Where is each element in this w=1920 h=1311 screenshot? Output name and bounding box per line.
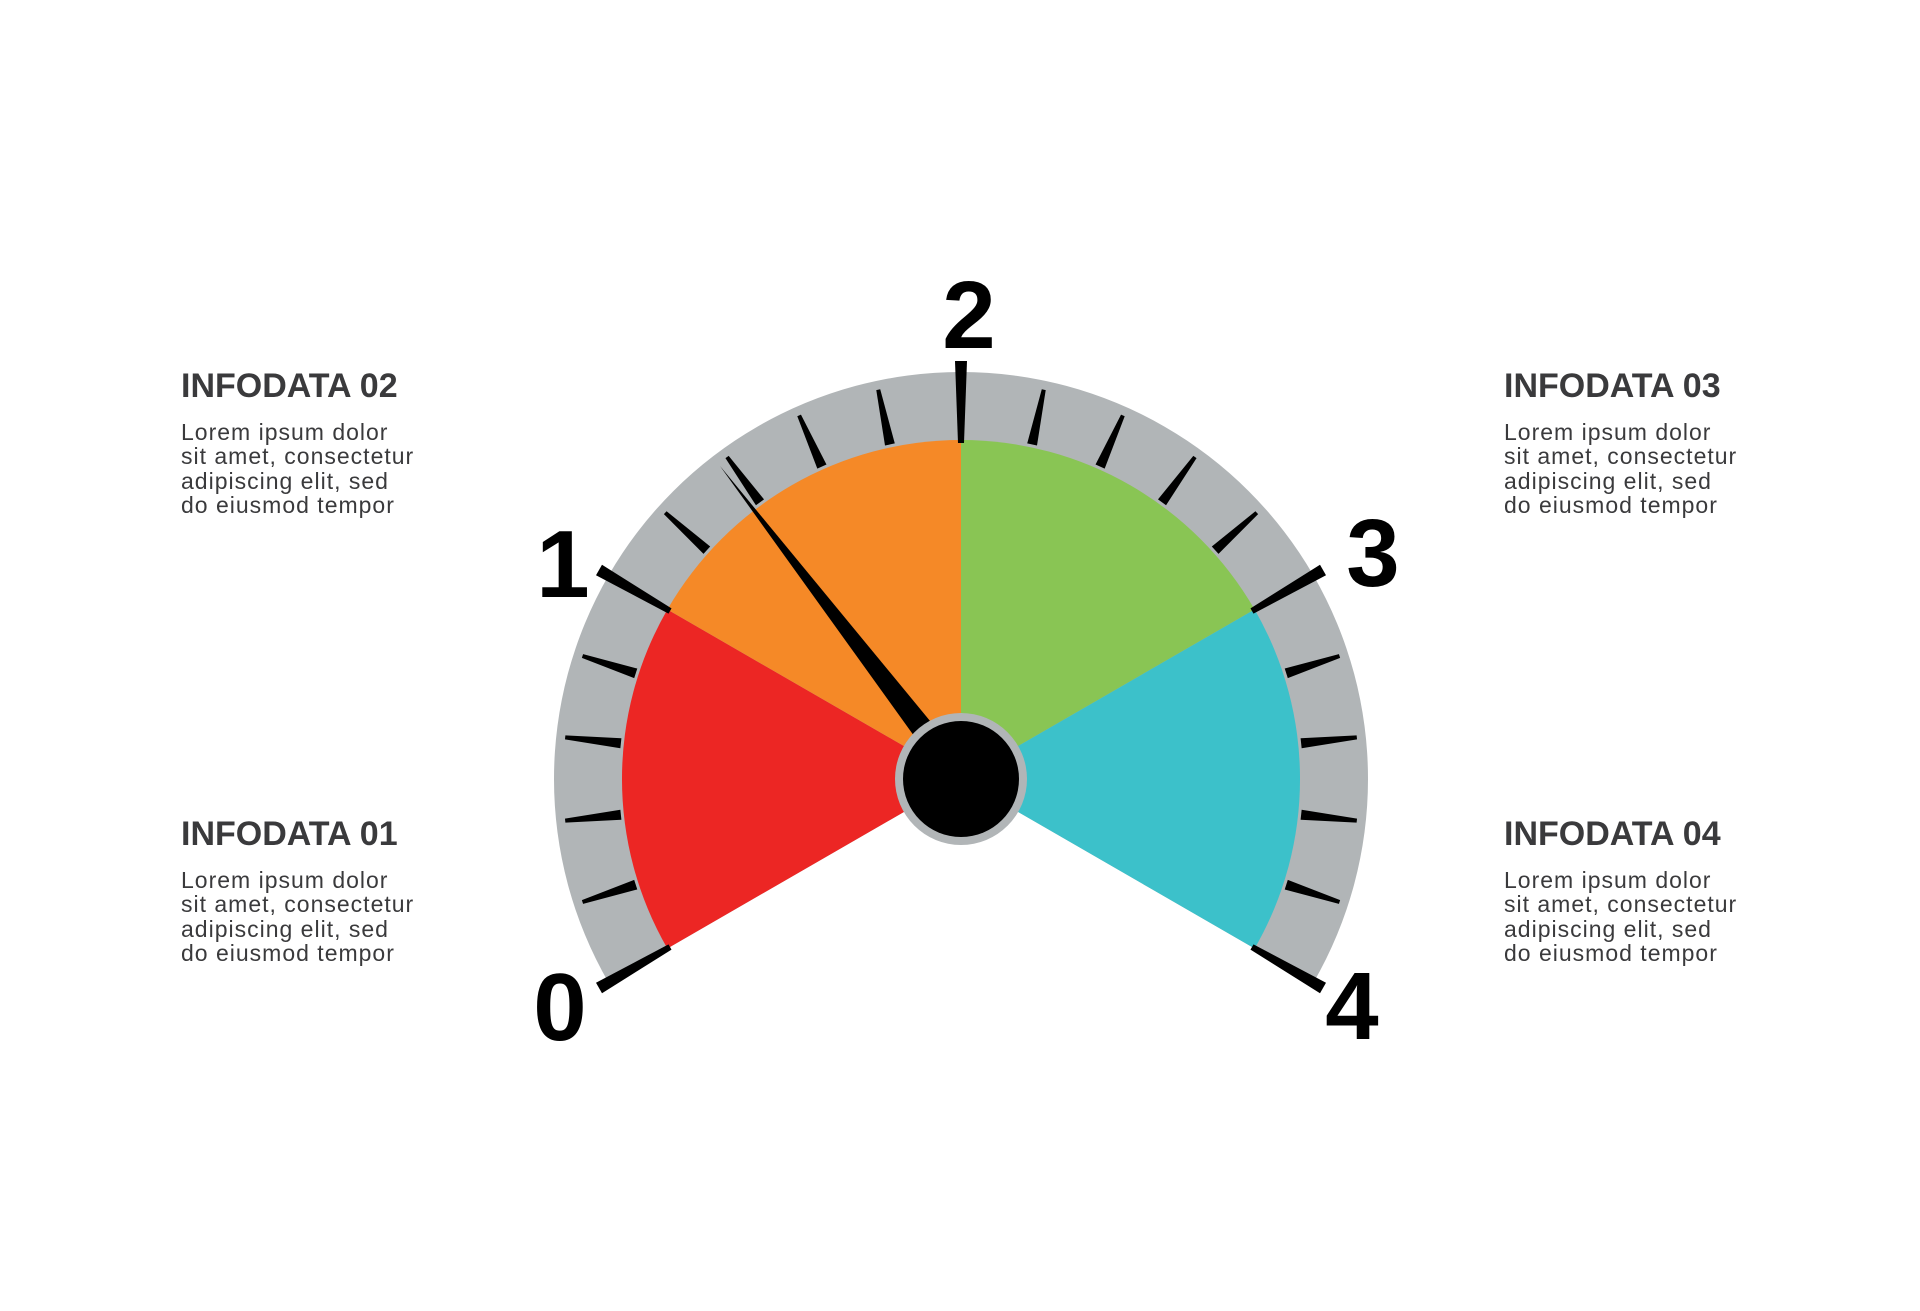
sector teal: [961, 610, 1300, 948]
text block: infodata 04: sit amet, consectetur: [1504, 891, 1737, 917]
text block: infodata 01: do eiusmod tempor: [181, 940, 395, 966]
sector orange: [667, 440, 961, 779]
text block: infodata 04: INFODATA 04: [1504, 815, 1721, 853]
text block: infodata 02: INFODATA 02: [181, 367, 398, 405]
text block: infodata 04: [1504, 815, 1737, 966]
text block: infodata 03: adipiscing elit, sed: [1504, 468, 1712, 494]
text block: infodata 04: do eiusmod tempor: [1504, 940, 1718, 966]
text block: infodata 03: [1504, 367, 1737, 518]
text block: infodata 02: Lorem ipsum dolor: [181, 419, 388, 445]
scale labels: 1: [536, 511, 590, 618]
text block: infodata 02: [181, 367, 414, 518]
text block: infodata 01: Lorem ipsum dolor: [181, 867, 388, 893]
scale labels: 0: [533, 954, 587, 1061]
gray rim: [554, 372, 1368, 982]
text block: infodata 02: adipiscing elit, sed: [181, 468, 389, 494]
needle: [710, 458, 971, 787]
text block: infodata 01: adipiscing elit, sed: [181, 916, 389, 942]
ticks: [565, 361, 1357, 993]
scale labels: [533, 262, 1400, 1061]
text block: infodata 01: [181, 815, 414, 966]
text block: infodata 03: Lorem ipsum dolor: [1504, 419, 1711, 445]
text block: infodata 02: sit amet, consectetur: [181, 443, 414, 469]
sector red: [622, 610, 961, 948]
sector green: [961, 440, 1255, 779]
text block: infodata 03: do eiusmod tempor: [1504, 492, 1718, 518]
scale labels: 2: [942, 262, 996, 369]
text block: infodata 02: do eiusmod tempor: [181, 492, 395, 518]
text block: infodata 01: INFODATA 01: [181, 815, 398, 853]
hub: [895, 713, 1027, 845]
text block: infodata 03: sit amet, consectetur: [1504, 443, 1737, 469]
text block: infodata 04: Lorem ipsum dolor: [1504, 867, 1711, 893]
scale labels: 4: [1325, 953, 1379, 1060]
text block: infodata 04: adipiscing elit, sed: [1504, 916, 1712, 942]
text block: infodata 03: INFODATA 03: [1504, 367, 1721, 405]
text block: infodata 01: sit amet, consectetur: [181, 891, 414, 917]
scale labels: 3: [1346, 500, 1400, 607]
